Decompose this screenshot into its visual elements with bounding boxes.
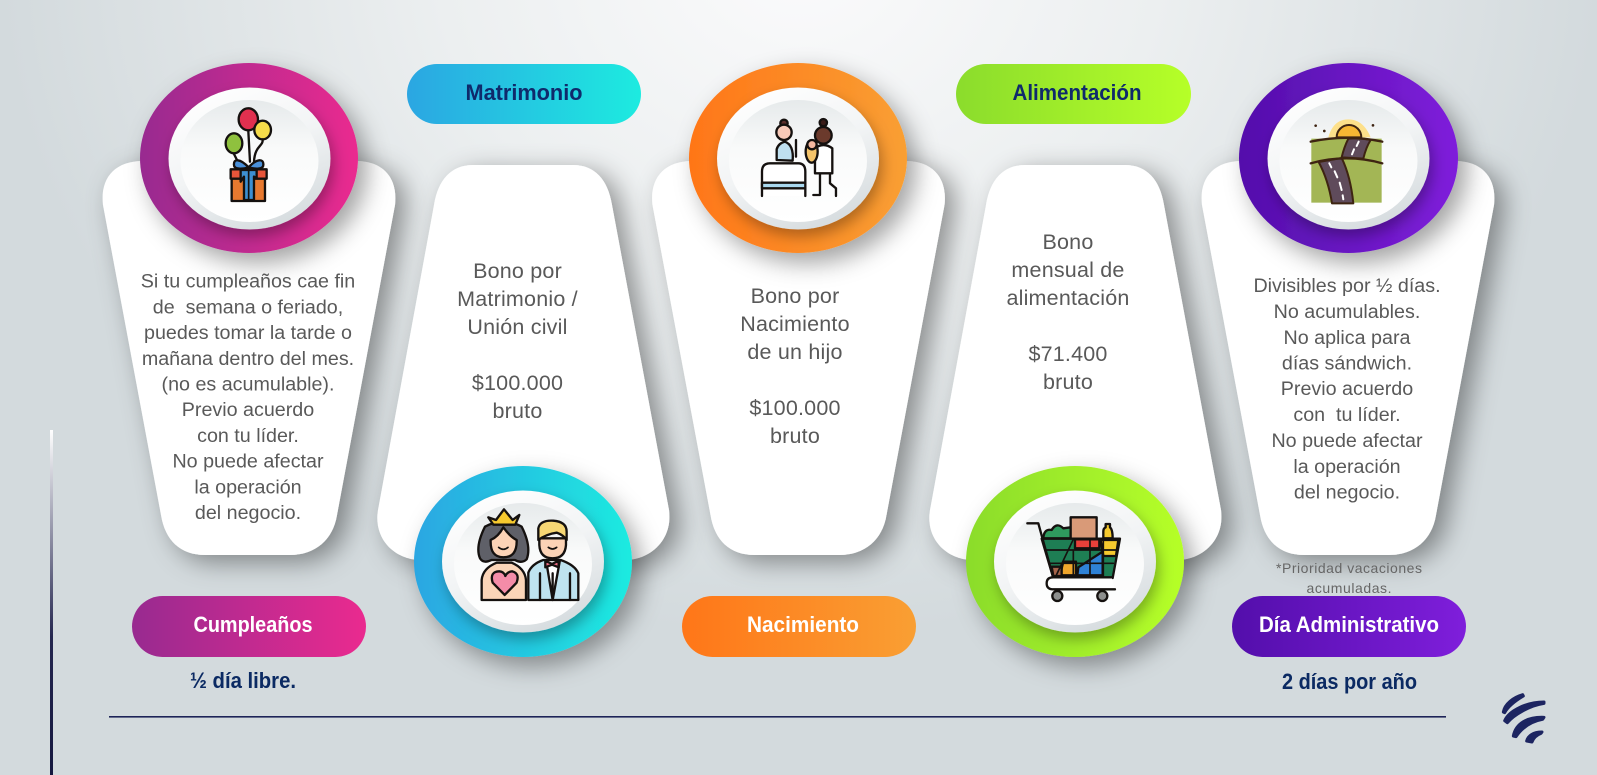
- text: Cumpleaños description: mañana dentro del mes.: [142, 348, 354, 370]
- footnote: vacation priority: acumuladas.: [1306, 580, 1392, 596]
- text: Matrimonio description: Unión civil: [467, 315, 568, 339]
- vertical accent line: [50, 430, 53, 775]
- text: Nacimiento description: $100.000: [749, 396, 841, 420]
- label: Matrimonio pill: Matrimonio: [466, 80, 582, 105]
- footnote: vacation priority: *Prioridad vacaciones: [1276, 560, 1422, 576]
- column: Cumpleaños: [103, 63, 395, 693]
- text: Cumpleaños description: Si tu cumpleaños cae fin: [141, 271, 355, 293]
- badge: Matrimonio ring: [414, 466, 632, 657]
- column: Alimentación: [929, 64, 1221, 657]
- text: Nacimiento description: [740, 284, 850, 448]
- text: Matrimonio description: [457, 259, 578, 423]
- text: Matrimonio description: bruto: [492, 399, 543, 423]
- text: Alimentación description: alimentación: [1006, 286, 1130, 310]
- text: Cumpleaños description: [141, 271, 355, 524]
- label: Matrimonio pill: [407, 64, 641, 124]
- text: Día Administrativo description: con tu líder.: [1293, 404, 1401, 426]
- label: Nacimiento pill: [682, 596, 916, 657]
- text: Cumpleaños description: (no es acumulable).: [162, 374, 334, 396]
- label: Cumpleaños pill: Cumpleaños: [194, 612, 312, 637]
- subtitle: two days per year: 2 días por año: [1282, 669, 1417, 694]
- text: Cumpleaños description: de semana o feriado,: [153, 296, 343, 318]
- text: Día Administrativo description: Previo acuerdo: [1281, 378, 1413, 400]
- text: Cumpleaños description: con tu líder.: [197, 425, 299, 447]
- text: Nacimiento description: Bono por: [751, 284, 839, 308]
- text: Matrimonio description: Matrimonio /: [457, 287, 578, 311]
- text: Matrimonio description: $100.000: [472, 371, 563, 395]
- text: Día Administrativo description: días sándwich.: [1282, 352, 1412, 374]
- column: Día Administrativo: [1202, 63, 1494, 694]
- text: Alimentación description: Bono: [1042, 230, 1094, 254]
- text: Nacimiento description: de un hijo: [747, 340, 843, 364]
- badge: Día Administrativo ring: [1239, 63, 1458, 253]
- column: Nacimiento: [652, 63, 945, 657]
- panel: Matrimonio card: [377, 165, 669, 560]
- text: Día Administrativo description: la operación: [1293, 456, 1401, 478]
- text: Alimentación description: [1006, 230, 1130, 394]
- icon: bride and groom: [478, 509, 578, 600]
- text: Alimentación description: mensual de: [1011, 258, 1125, 282]
- label: Día Administrativo pill: [1232, 596, 1466, 657]
- text: Día Administrativo description: [1253, 275, 1441, 504]
- text: Alimentación description: $71.400: [1028, 342, 1108, 366]
- text: Nacimiento description: Nacimiento: [740, 312, 850, 336]
- badge: Nacimiento ring: [689, 63, 907, 253]
- column: Matrimonio: [377, 64, 669, 657]
- text: Día Administrativo description: No acumulables.: [1274, 301, 1420, 323]
- panel: Día Administrativo card: [1202, 161, 1494, 555]
- logo: striped globe: [1503, 695, 1544, 742]
- panel: Cumpleaños card: [103, 161, 395, 555]
- text: Cumpleaños description: No puede afectar: [172, 451, 324, 473]
- icon: shopping cart: [1027, 517, 1120, 601]
- label: Alimentación pill: [956, 64, 1191, 124]
- text: Alimentación description: bruto: [1043, 370, 1093, 394]
- text: Día Administrativo description: No aplica para: [1284, 327, 1411, 349]
- subtitle: half day off: ½ día libre.: [190, 668, 296, 693]
- icon: gift with balloons: [226, 108, 271, 201]
- text: Día Administrativo description: del negocio.: [1294, 482, 1400, 504]
- text: Nacimiento description: bruto: [770, 424, 820, 448]
- text: Día Administrativo description: No puede afectar: [1271, 430, 1423, 452]
- text: Cumpleaños description: la operación: [194, 476, 302, 498]
- text: Día Administrativo description: Divisibles por ½ días.: [1253, 275, 1441, 297]
- text: Cumpleaños description: Previo acuerdo: [182, 399, 314, 421]
- label: Cumpleaños pill: [132, 596, 366, 657]
- footnote: vacation priority: [1276, 560, 1422, 596]
- label: Día Administrativo pill: Día Administrativo: [1259, 612, 1439, 637]
- text: Matrimonio description: Bono por: [473, 259, 562, 283]
- text: Cumpleaños description: puedes tomar la tarde o: [144, 322, 352, 344]
- label: Alimentación pill: Alimentación: [1012, 80, 1142, 105]
- panel: Nacimiento card: [652, 161, 945, 555]
- badge: Alimentación ring: [966, 466, 1184, 657]
- horizontal rule: [109, 716, 1446, 718]
- text: Cumpleaños description: del negocio.: [195, 502, 301, 524]
- panel: Alimentación card: [929, 165, 1221, 560]
- label: Nacimiento pill: Nacimiento: [747, 612, 859, 637]
- icon: mother, bed and nurse: [762, 119, 836, 196]
- badge: Cumpleaños ring: [140, 63, 358, 253]
- icon: road through hills at sunrise: [1311, 119, 1382, 203]
